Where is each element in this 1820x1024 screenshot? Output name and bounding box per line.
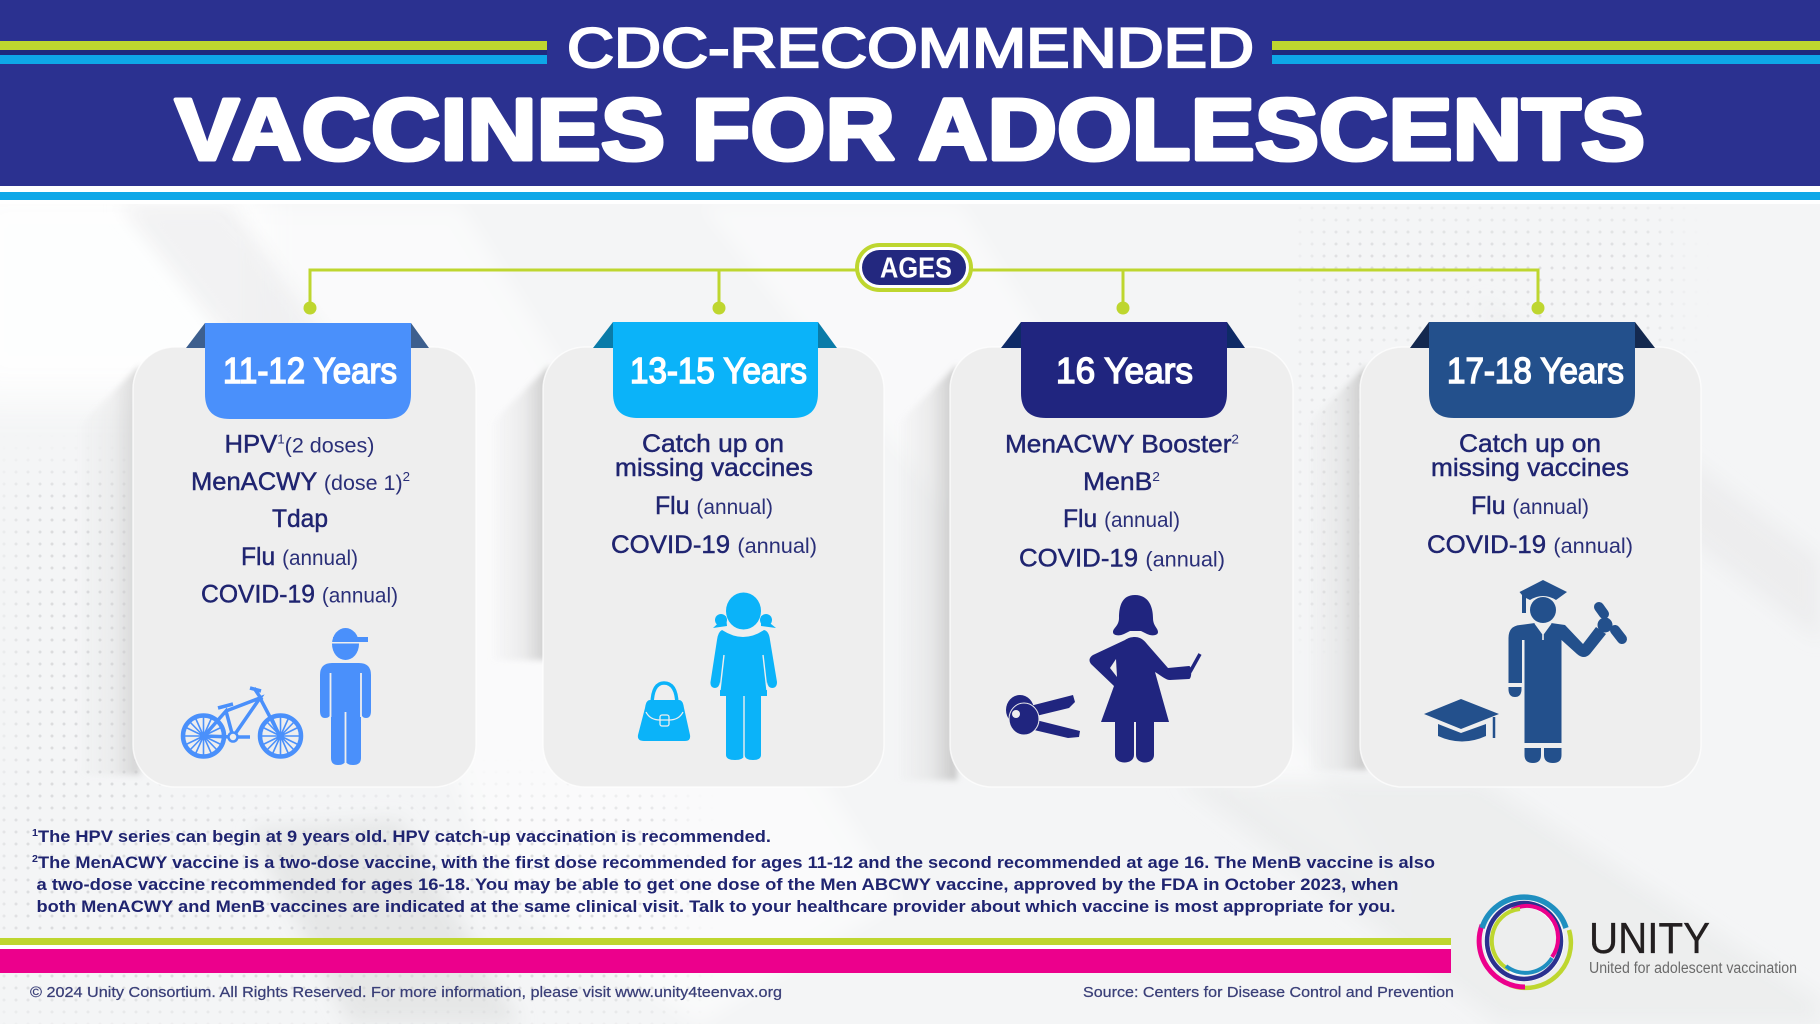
- panel: 17-18 years: [1360, 322, 1701, 787]
- header banner: [0, 0, 1820, 204]
- logo: Unity: [1479, 897, 1797, 988]
- logo: Unity: UNITY: [1589, 914, 1710, 963]
- footnotes: a two-dose vaccine recommended for ages 16-18. You may be able to get one dose of the Men ABCWY vaccine, approved by the FDA in October 2023, when: [36, 875, 1398, 894]
- vaccine list: COVID-19 (annual): [201, 580, 398, 608]
- icon: keys: [1006, 695, 1080, 738]
- vaccine list: Flu (annual): [655, 492, 773, 520]
- footnotes: 2: [32, 854, 38, 865]
- icon: bicycle: [183, 688, 301, 757]
- footer color bars: [0, 938, 1451, 973]
- vaccine list: missing vaccines: [615, 454, 813, 482]
- title: Vaccines for Adolescents: VACCINES FOR ADOLESCENTS: [175, 82, 1645, 178]
- vaccine list: COVID-19 (annual): [611, 531, 817, 559]
- vaccine list: Flu (annual): [241, 543, 358, 571]
- vaccine list: MenACWY (dose 1): [191, 468, 401, 496]
- vaccine list: COVID-19 (annual): [1427, 531, 1633, 559]
- icon: graduation cap: [1424, 699, 1499, 742]
- vaccine list: Flu (annual): [1471, 492, 1589, 520]
- footnotes: The HPV series can begin at 9 years old. HPV catch-up vaccination is recommended.: [38, 827, 771, 846]
- vaccine list: (2 doses): [285, 434, 374, 458]
- footnotes: 1: [32, 828, 38, 839]
- panel: 16 years: [950, 322, 1293, 787]
- icon: girl: [710, 592, 777, 760]
- vaccine list: [191, 430, 410, 608]
- panel: 13-15 years: [543, 322, 884, 787]
- ages pill: [855, 243, 973, 292]
- vaccine list: MenACWY Booster: [1005, 430, 1221, 458]
- ages pill: AGES: [880, 252, 952, 284]
- vaccine list: HPV: [224, 430, 276, 458]
- vaccine list: [1427, 430, 1633, 559]
- vaccine list: 2: [1152, 469, 1160, 484]
- tab label: 17-18 Years: [1447, 350, 1624, 391]
- vaccine list: 1: [277, 432, 285, 446]
- vaccine list: 2: [403, 469, 410, 484]
- vaccine list: missing vaccines: [1431, 454, 1629, 482]
- vaccine list: COVID-19 (annual): [1019, 544, 1225, 572]
- card shadows: [80, 365, 1367, 780]
- icon: handbag: [638, 683, 690, 741]
- footnotes: [32, 827, 1435, 916]
- vaccine list: Catch up on: [642, 430, 784, 458]
- tab label: 11-12 Years: [223, 350, 397, 391]
- ages connector lines: [304, 270, 1544, 314]
- logo rings: [1479, 897, 1571, 988]
- icon: woman: [1090, 595, 1200, 762]
- tab label: 16 Years: [1056, 350, 1193, 391]
- logo: Unity: United for adolescent vaccination: [1589, 960, 1797, 977]
- panel: 11-12 years: [133, 323, 476, 787]
- vaccine list: 2: [1231, 432, 1239, 446]
- tab label: 13-15 Years: [630, 350, 807, 391]
- icon: graduate: [1508, 580, 1622, 763]
- copyright: © 2024 Unity Consortium. All Rights Reserved. For more information, please visit www.unity4teenvax.org: [30, 984, 782, 1001]
- vaccine list: MenB: [1083, 468, 1148, 496]
- source: Source: Centers for Disease Control and Prevention: [1083, 984, 1454, 1001]
- vaccine list: Catch up on: [1459, 430, 1601, 458]
- icon: boy: [320, 628, 371, 765]
- footnotes: both MenACWY and MenB vaccines are indicated at the same clinical visit. Talk to your healthcare provider about which vaccine is most appropriate for you.: [36, 897, 1396, 916]
- title: CDC-Recommended: CDC-RECOMMENDED: [567, 16, 1254, 79]
- vaccine list: [611, 430, 817, 559]
- footnotes: The MenACWY vaccine is a two-dose vaccine, with the first dose recommended for ages 11-12 and the second recommended at age 16. The MenB vaccine is also: [38, 853, 1435, 872]
- vaccine list: Flu (annual): [1063, 505, 1180, 533]
- vaccine list: Tdap: [272, 505, 328, 533]
- vaccine list: [1005, 430, 1239, 572]
